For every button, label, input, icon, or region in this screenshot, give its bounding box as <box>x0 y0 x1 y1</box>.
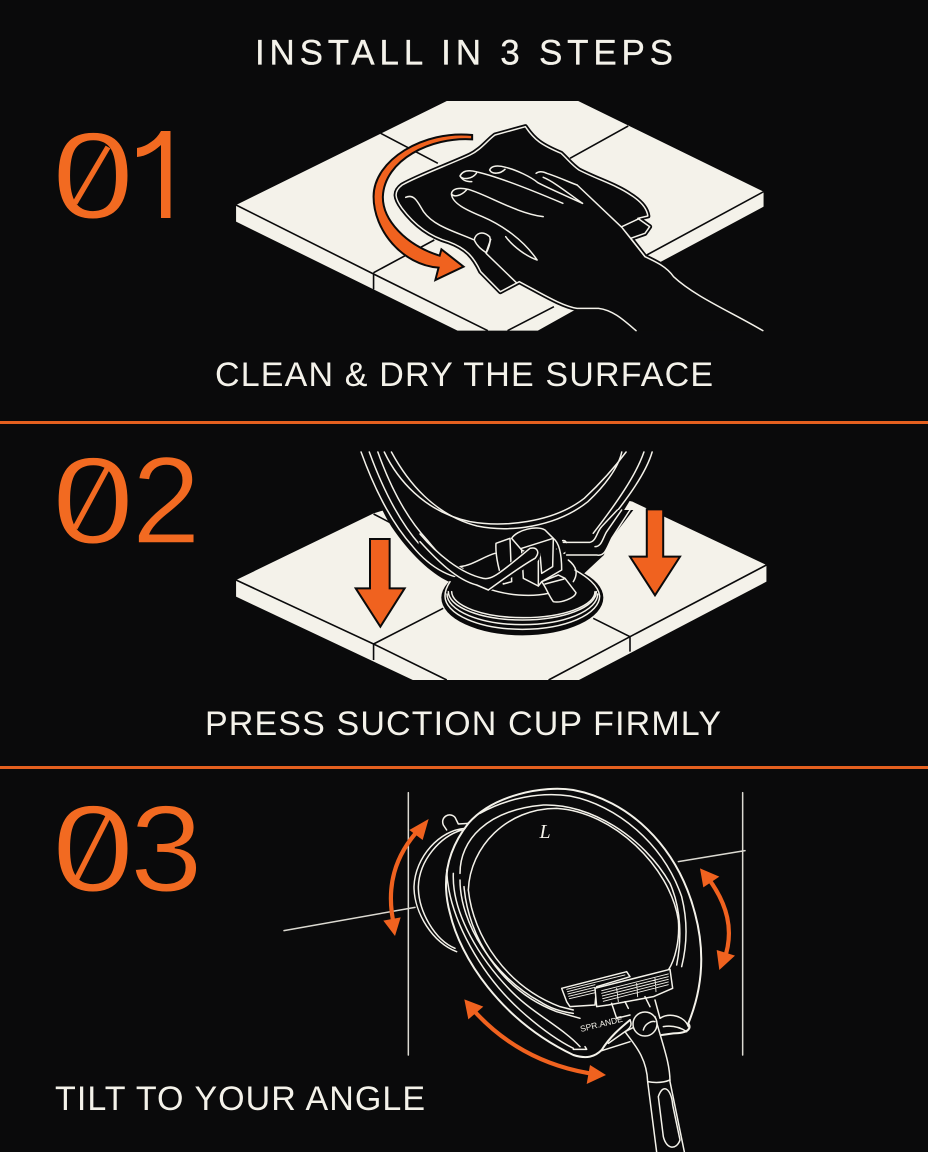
step number 02: 0 <box>52 432 134 569</box>
brand mark: SPR.ANDE <box>579 1014 624 1034</box>
tile surface <box>236 473 766 680</box>
step number 02: 2 <box>132 433 200 570</box>
wall lines <box>284 793 745 1055</box>
panel: step 1 <box>52 101 764 394</box>
mirror arm <box>420 510 633 590</box>
title: INSTALL IN 3 STEPS <box>255 34 673 72</box>
suction cup back <box>414 815 468 952</box>
clamp mount <box>496 528 576 602</box>
step number 02 <box>52 432 200 570</box>
step number 03: 0 <box>52 780 134 917</box>
suction cup and clamp <box>420 510 633 635</box>
arrow: press left <box>356 539 405 627</box>
mirror rings <box>446 789 701 1057</box>
arrow: circular wiping motion <box>374 134 472 280</box>
arrow: press right <box>630 509 680 595</box>
panel: step 2 <box>52 432 766 743</box>
panel: step 3 <box>52 779 745 1152</box>
hand and cloth <box>396 127 763 331</box>
caption: step 3: TILT TO YOUR ANGLE <box>55 1080 425 1118</box>
step number 01: 1 <box>131 108 199 245</box>
arrow: tilt right <box>700 868 735 970</box>
step number 03 <box>52 779 203 917</box>
tile surface <box>236 101 764 331</box>
step number 01 <box>52 107 199 245</box>
illustration: hand wiping tile <box>236 101 764 331</box>
illustration: mirror pressed on tile <box>236 452 766 680</box>
caption: step 1: CLEAN & DRY THE SURFACE <box>215 356 713 394</box>
divider <box>0 766 928 769</box>
razor <box>562 969 688 1152</box>
caption: step 2: PRESS SUCTION CUP FIRMLY <box>205 705 721 743</box>
divider <box>0 421 928 424</box>
arrow: tilt left <box>383 819 429 936</box>
step number 03: 3 <box>130 779 203 917</box>
suction cup base <box>441 553 603 635</box>
mirror frame <box>361 452 652 582</box>
arrow: tilt bottom <box>464 999 606 1084</box>
illustration: mirror tilting on wall <box>284 789 745 1152</box>
step number 01: 0 <box>52 107 134 244</box>
mirror logo: L <box>538 821 551 843</box>
